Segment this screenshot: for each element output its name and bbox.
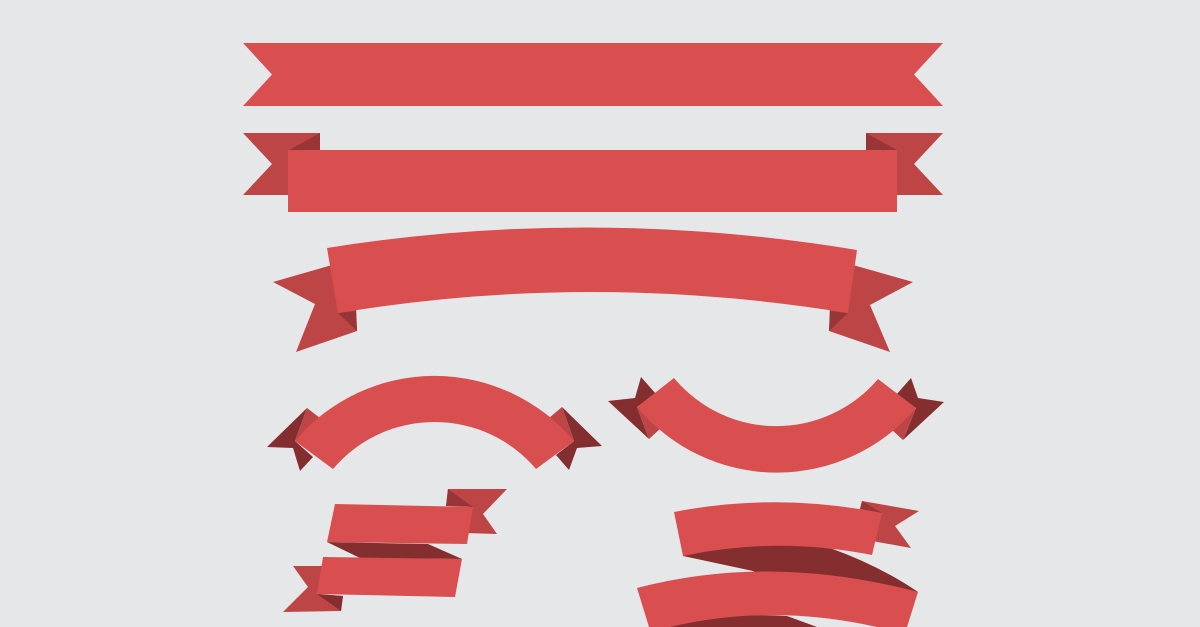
ribbon 3: gently arched banner with folded tails xyxy=(273,227,913,352)
ribbon 6: flat zigzag banner xyxy=(283,489,507,612)
ribbon 4: arch banner xyxy=(267,376,602,471)
ribbon 2: straight banner with folded tails xyxy=(243,133,943,212)
ribbon 7: curved zigzag banner xyxy=(637,501,919,627)
ribbon 1: flat swallowtail banner xyxy=(243,43,943,106)
ribbon 5: bowl-shaped banner xyxy=(608,377,944,473)
